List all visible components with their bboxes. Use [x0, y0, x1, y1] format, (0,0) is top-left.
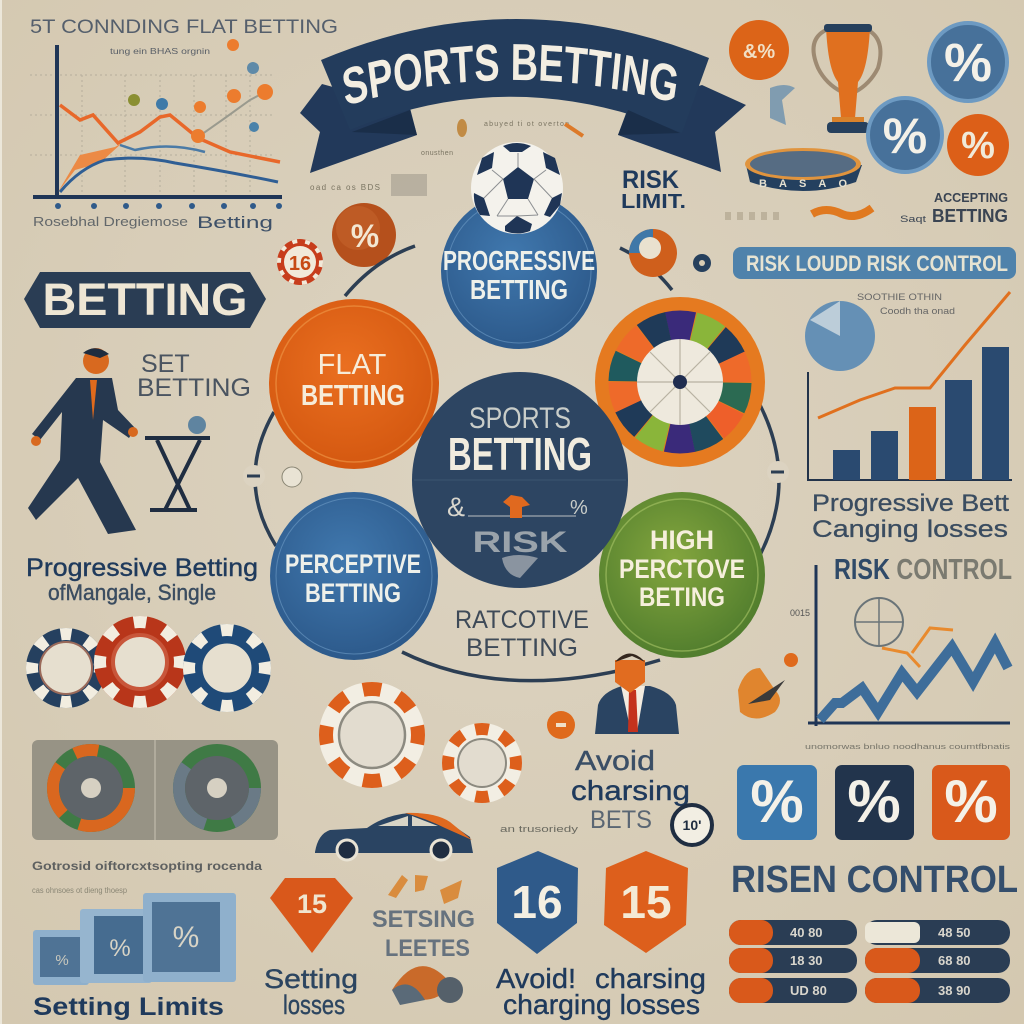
faint header notes: oad ca os BDS: [310, 183, 380, 192]
zigzag chart: [790, 565, 1010, 751]
stopwatch icon: [672, 805, 712, 845]
roulette panel left: [32, 740, 278, 840]
setting limits cards: %: [173, 921, 199, 954]
risk limit label: LIMIT.: [621, 191, 686, 213]
percent tiles: %: [944, 768, 998, 835]
line chart top left: tung ein BHAS orgnin: [110, 47, 210, 56]
setting losses label: [264, 964, 358, 1020]
setting limits cards: %: [55, 952, 69, 969]
icon: car: [315, 813, 473, 860]
hub: center sports betting: SPORTS: [469, 402, 571, 435]
hub: high perceptive betting: [599, 492, 765, 658]
bar chart right: SOOTHIE OTHIN: [857, 292, 942, 302]
setting losses label: losses: [283, 990, 345, 1020]
progress bars: 68 80: [938, 953, 971, 968]
setting limits label: Setting Limits: [33, 993, 224, 1021]
line chart top left: 5T CONNDING FLAT BETTING: [30, 17, 338, 38]
progressive bett caption: Canging losses: [812, 516, 1008, 543]
betting banner: BETTING: [42, 274, 248, 325]
shield 15: [604, 851, 688, 953]
set betting text: [137, 350, 251, 402]
accepting betting label: [725, 190, 1008, 226]
setting limits cards: %: [109, 935, 131, 962]
small orange dot: [547, 711, 575, 739]
hub: roulette wheel: [595, 297, 765, 467]
progress bars: 38 90: [938, 983, 971, 998]
small roulette chip: [629, 229, 711, 277]
hub: center sports betting: [412, 372, 628, 588]
trophy and percent chips top right: %: [944, 33, 992, 93]
percent tiles: %: [847, 768, 901, 835]
bar chart right: [805, 292, 1012, 480]
avoid chasing bets label: Avoid: [575, 745, 655, 776]
avoid charsing losses: [496, 963, 706, 1020]
icon: businessman bust: [595, 654, 679, 734]
trophy and percent chips top right: &%: [743, 41, 775, 63]
small orange wrench: [738, 653, 798, 718]
shield 16: 16: [511, 876, 563, 928]
progressive betting left caption: Progressive Betting: [26, 554, 258, 582]
hub: high perceptive betting: HIGH: [650, 525, 714, 555]
hub: center sports betting: RISK: [472, 526, 568, 559]
hub: center sports betting: &: [447, 492, 465, 522]
small caption lower left: cas ohnsoes ot dieng thoesp: [32, 886, 128, 895]
accepting betting label: BETTING: [932, 206, 1008, 226]
avoid charsing losses: Avoid!: [496, 963, 576, 994]
hub: flat betting: [269, 299, 439, 469]
risk limit label: [621, 166, 686, 213]
setting limits cards: [33, 893, 236, 985]
setting losses label: Setting: [264, 964, 358, 994]
hub: center sports betting: %: [570, 497, 588, 519]
avoid charsing losses: charging losses: [503, 989, 700, 1020]
trophy and percent chips top right: %: [961, 125, 995, 167]
round tray: [745, 148, 862, 191]
stopwatch icon: 10': [683, 817, 701, 833]
hub: high perceptive betting: BETING: [639, 582, 725, 612]
progress bars: [729, 920, 1010, 1003]
avoid chasing bets label: BETS: [590, 806, 652, 834]
person at table: [28, 348, 210, 534]
setsing lettes text: [372, 906, 475, 962]
faint header notes: abuyed ti ot overton: [484, 121, 569, 128]
bar chart right: Coodh tha onad: [880, 306, 955, 316]
small caption lower left: [32, 859, 262, 895]
avoid chasing bets label: charsing: [571, 775, 690, 806]
shield 15: 15: [620, 876, 672, 928]
trophy and percent chips top right: %: [883, 108, 927, 164]
poker chips left: [26, 616, 271, 712]
percent tiles: %: [750, 768, 804, 835]
progress bars: 40 80: [790, 925, 823, 940]
hub: percentage betting: PERCEPTIVE: [285, 549, 421, 579]
hub: progressive betting: [441, 193, 597, 349]
progressive betting left caption: ofMangale, Single: [48, 580, 216, 605]
ratcotive betting label: [455, 606, 589, 662]
hub: percentage betting: BETTING: [305, 578, 401, 608]
progressive bett caption: Progressive Bett: [812, 490, 1009, 517]
setsing lettes text: LEETES: [385, 935, 470, 962]
hub: flat betting: BETTING: [301, 380, 405, 412]
small caption lower left: Gotrosid oiftorcxtsopting rocenda: [32, 859, 262, 873]
line chart top left: [30, 17, 338, 232]
hub: percentage betting: [270, 492, 438, 660]
progress bars: 48 50: [938, 925, 971, 940]
small note near car: an trusoriedy: [500, 824, 579, 834]
title ribbon: [300, 19, 746, 173]
shield 16: [497, 851, 578, 954]
hub: high perceptive betting: PERCTOVE: [619, 554, 745, 584]
progressive bett caption: [812, 490, 1009, 543]
line chart top left: Rosebhal Dregiemose: [33, 214, 188, 229]
zigzag chart: 0015: [790, 608, 810, 618]
progress bars: 18 30: [790, 953, 823, 968]
progress bars: UD 80: [790, 983, 827, 998]
faint header notes: onusthen: [421, 150, 453, 157]
icon: soccer ball: [471, 142, 563, 234]
set betting text: BETTING: [137, 374, 251, 402]
hub: progressive betting: PROGRESSIVE: [443, 245, 595, 276]
line chart top left: Betting: [197, 213, 273, 232]
title text: SPORTS BETTING: [343, 44, 677, 104]
ratcotive betting label: RATCOTIVE: [455, 606, 589, 634]
avoid chasing bets label: [571, 745, 690, 834]
hub: flat betting: FLAT: [318, 349, 387, 381]
zigzag chart: unomorwas bnluo noodhanus coumtfbnatis: [805, 742, 1010, 751]
percent chips left of hub: 16: [289, 253, 311, 275]
accepting betting label: Saqt: [900, 214, 927, 224]
hub: center sports betting: BETTING: [448, 428, 592, 480]
orange gem badge: 15: [297, 889, 327, 919]
avoid charsing losses: charsing: [595, 963, 706, 994]
percent tiles: [737, 765, 1010, 840]
round tray: B A S A O: [759, 178, 847, 190]
accepting betting label: ACCEPTING: [934, 190, 1008, 205]
connecting ring: [243, 246, 789, 681]
risk limit label: RISK: [622, 166, 679, 194]
large poker chips center: [319, 682, 522, 803]
progressive betting left caption: [26, 554, 258, 605]
ratcotive betting label: BETTING: [466, 634, 578, 662]
hub: progressive betting: BETTING: [470, 274, 568, 305]
faint header notes: [310, 119, 583, 196]
percent chips left of hub: [277, 203, 396, 285]
small orange icons: [388, 875, 463, 1005]
percent chips left of hub: %: [351, 218, 379, 254]
orange gem badge: [270, 878, 353, 953]
setsing lettes text: SETSING: [372, 906, 475, 933]
trophy and percent chips top right: [729, 20, 1009, 176]
set betting text: SET: [141, 350, 190, 378]
